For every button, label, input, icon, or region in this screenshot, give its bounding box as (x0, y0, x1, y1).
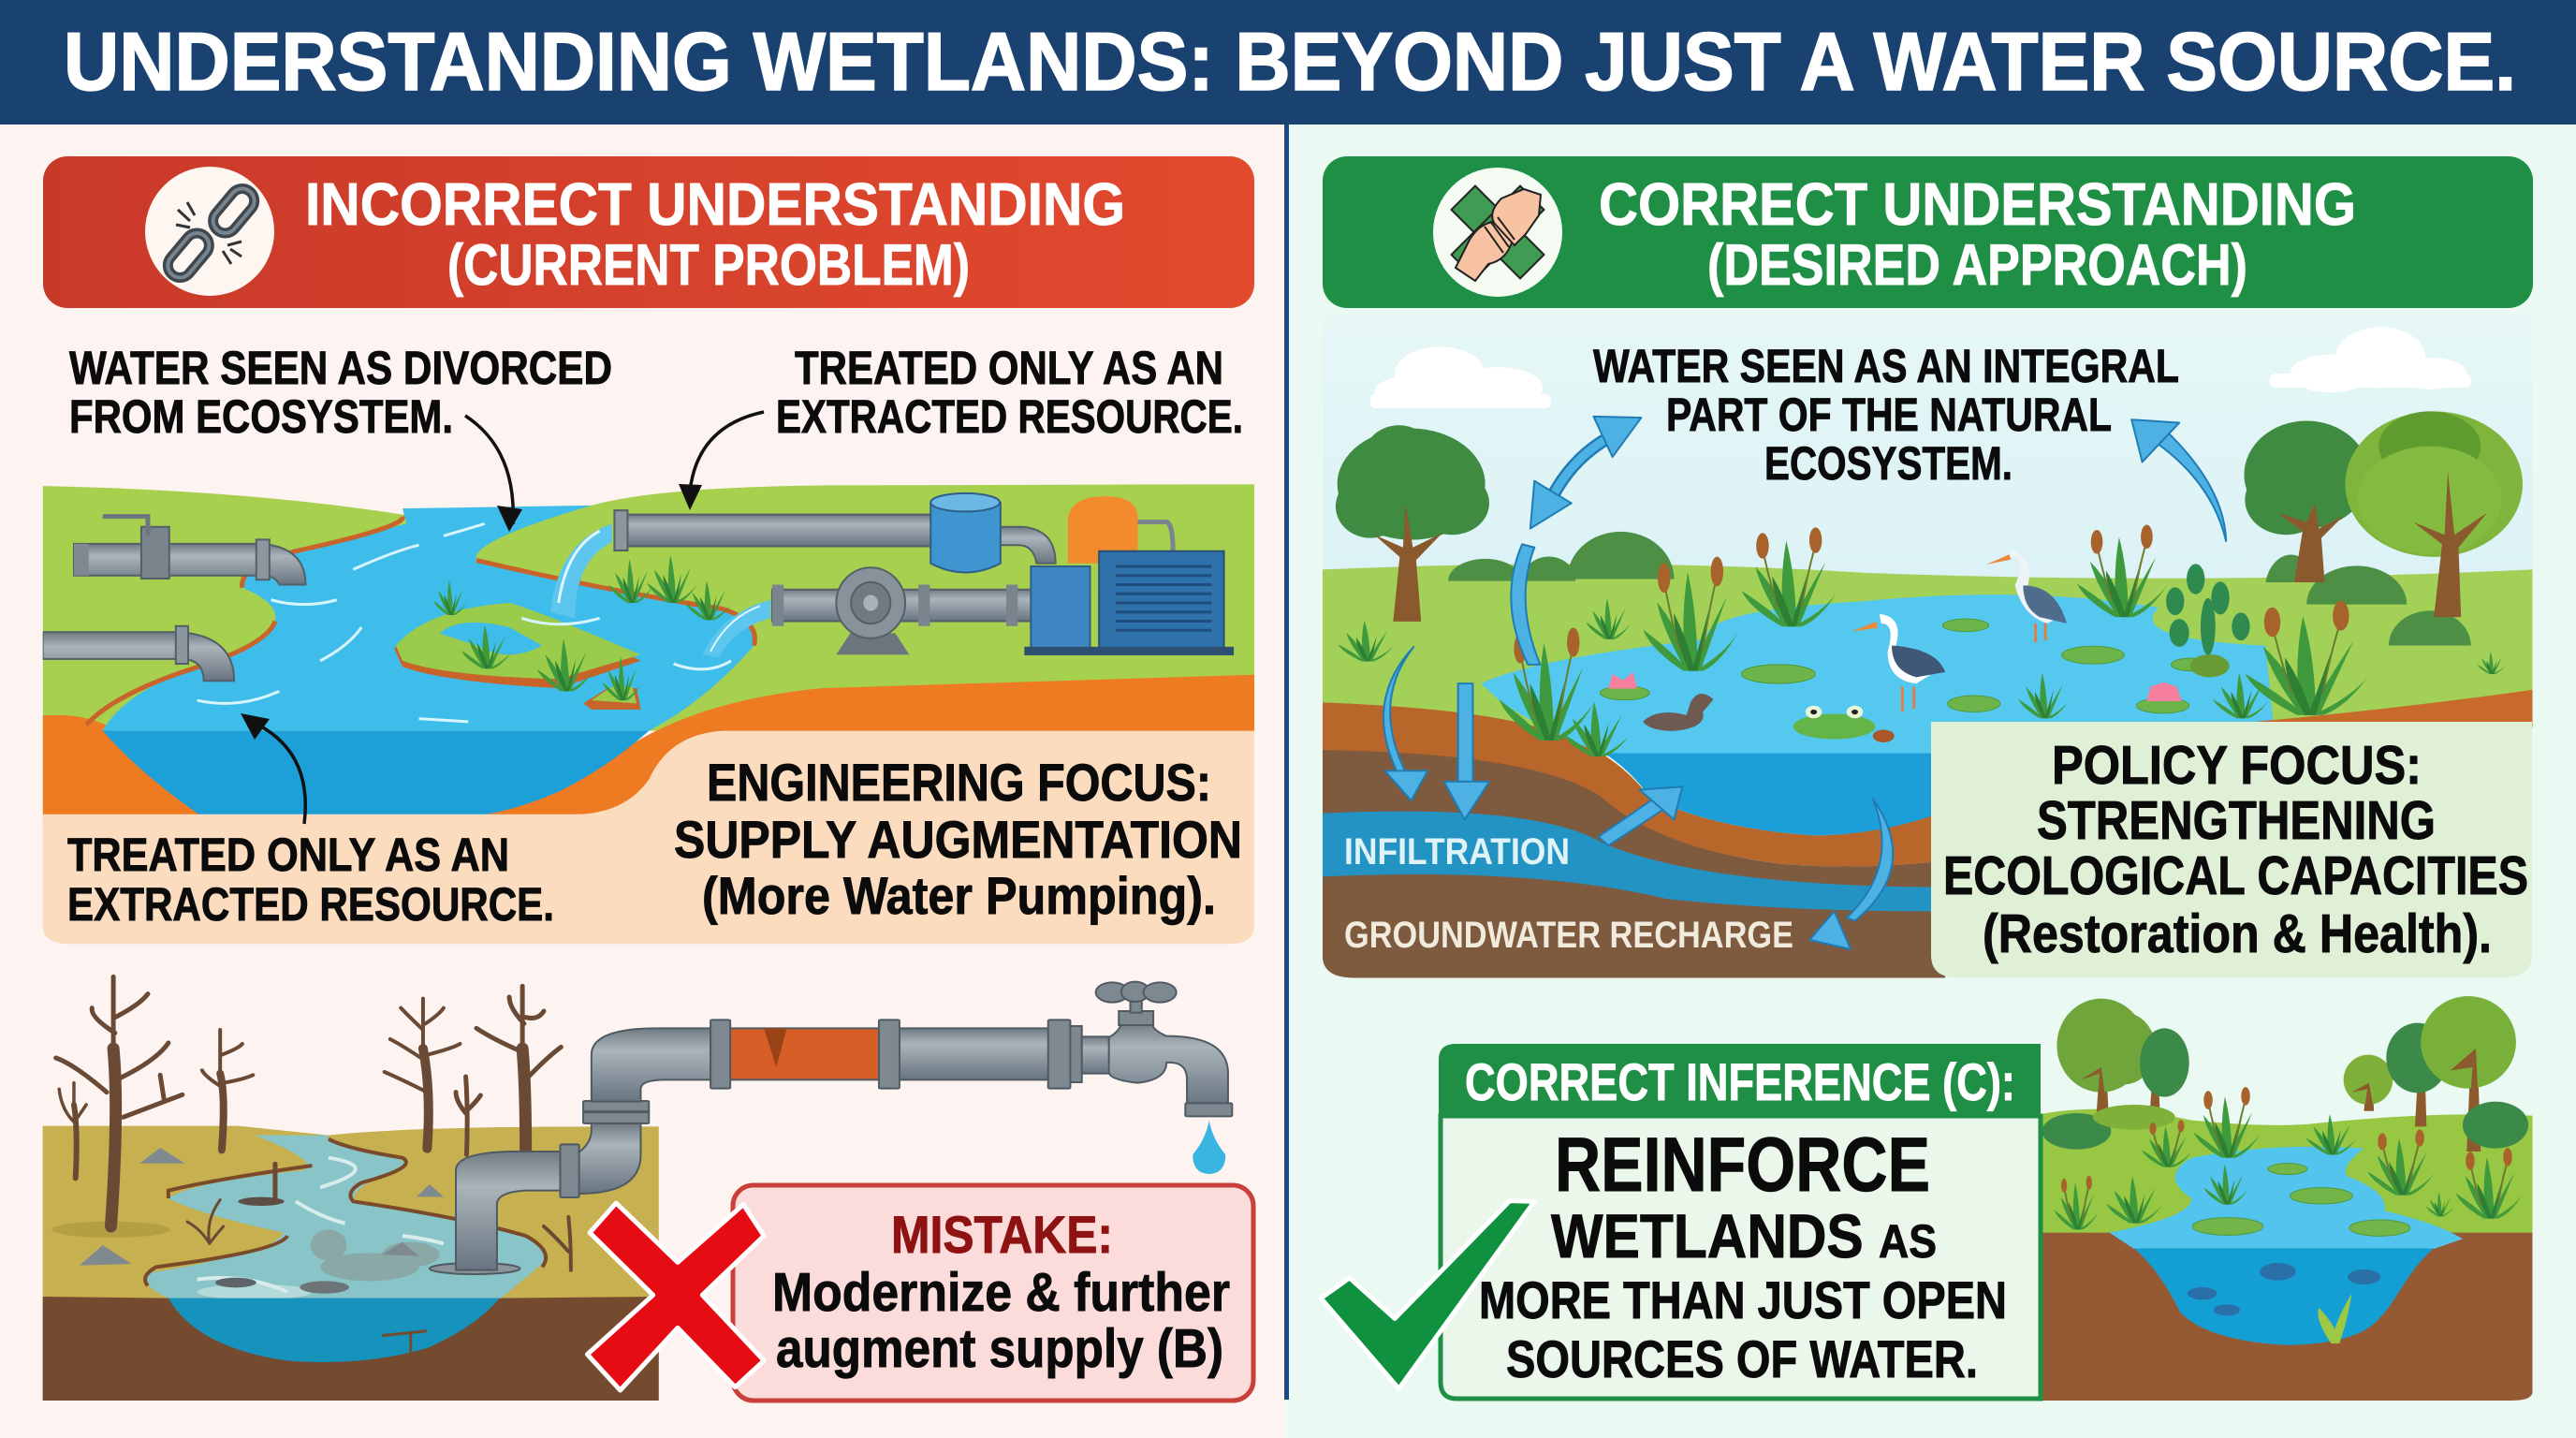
text: engineering focus (674, 753, 1242, 925)
arrow: to outfall (241, 713, 305, 824)
heron (1986, 550, 2067, 642)
background: left panel (0, 125, 1286, 1438)
right trees (2244, 411, 2523, 617)
callout: divorced from ecosystem (69, 342, 612, 443)
reeds (433, 554, 730, 700)
lily pads (1600, 619, 2212, 713)
panel: engineering focus background (43, 731, 1254, 944)
water drop (1193, 1121, 1225, 1174)
land (2041, 1109, 2532, 1236)
header text (305, 170, 1125, 298)
icon: joined hands (1433, 168, 1562, 297)
background bushes (1448, 532, 2471, 646)
faucet pipe (430, 982, 1232, 1274)
arrow: to pipe (679, 412, 764, 510)
callout: extracted resource bottom: EXTRACTED RESOURCE. (67, 878, 554, 931)
rocks (80, 1148, 444, 1294)
inference text: REINFORCE (1555, 1123, 1930, 1208)
callout: mistake (733, 1185, 1253, 1401)
sky (1323, 394, 2533, 579)
left tree (1336, 425, 1489, 622)
fish (2188, 1263, 2380, 1315)
clouds (1370, 328, 2471, 408)
text: policy focus: STRENGTHENING (2037, 790, 2436, 851)
text: engineering focus: ENGINEERING FOCUS: (707, 753, 1211, 812)
inference heading: CORRECT INFERENCE (C): (1465, 1052, 2015, 1111)
title banner (0, 0, 2576, 125)
deep water (2134, 1248, 2434, 1345)
inference text: MORE THAN JUST OPEN (1479, 1270, 2007, 1329)
inference heading (1439, 1044, 2041, 1116)
soil (43, 675, 1254, 819)
duck (1643, 694, 1714, 731)
callout: mistake: Modernize & further (772, 1262, 1230, 1323)
header text (1599, 170, 2356, 298)
dry ground (43, 1126, 659, 1301)
lotus flowers (1608, 672, 2182, 701)
reeds and cattails (1339, 525, 2506, 756)
water cycle arrows (1383, 417, 2226, 949)
callout: extracted resource bottom: TREATED ONLY AS AN (67, 829, 509, 881)
inference text: SOURCES OF WATER. (1506, 1329, 1978, 1388)
text: engineering focus: (More Water Pumping). (702, 866, 1216, 925)
label: infiltration: INFILTRATION (1344, 831, 1570, 873)
panel: incorrect understanding header (43, 156, 1254, 308)
pipe 1 with valve (74, 517, 305, 584)
header text: INCORRECT UNDERSTANDING (305, 170, 1125, 238)
stream (2110, 1147, 2463, 1249)
land (43, 484, 1254, 731)
mud patches (198, 1229, 439, 1299)
inference text (1479, 1123, 2007, 1388)
callout: extracted resource top: EXTRACTED RESOURCE. (776, 390, 1243, 443)
callout: divorced from ecosystem: FROM ECOSYSTEM. (69, 390, 453, 443)
pipe 2 (43, 626, 234, 681)
text: policy focus (1943, 735, 2528, 964)
callout: mistake: augment supply (B) (776, 1318, 1223, 1379)
land (1323, 564, 2532, 727)
label: groundwater recharge: GROUNDWATER RECHARGE (1344, 915, 1793, 956)
dead trees (56, 976, 571, 1270)
reeds (2055, 1087, 2523, 1343)
callout: extracted resource bottom (67, 829, 554, 931)
panel: policy focus background (1931, 722, 2532, 977)
icon: red X (587, 1203, 764, 1390)
icon: green check (1321, 1201, 1534, 1388)
callout: mistake: MISTAKE: (891, 1205, 1113, 1264)
pipe 3 and tanks (614, 493, 1173, 572)
illustration: healthy wetland (2041, 996, 2533, 1401)
pump machine (772, 551, 1234, 655)
arrow: to river (465, 416, 522, 532)
text: policy focus: POLICY FOCUS: (2052, 735, 2422, 796)
header text: (DESIRED APPROACH) (1707, 233, 2247, 298)
label: water integral: ECOSYSTEM. (1764, 437, 2012, 490)
panel: correct understanding header (1323, 156, 2533, 308)
center divider (1284, 125, 1289, 1400)
callout: extracted resource top (776, 342, 1243, 443)
label: water integral: WATER SEEN AS AN INTEGRAL (1593, 340, 2179, 392)
text: policy focus: (Restoration & Health). (1983, 903, 2492, 964)
frog (1793, 706, 1895, 742)
header text: CORRECT UNDERSTANDING (1599, 170, 2356, 238)
text: engineering focus: SUPPLY AUGMENTATION (674, 810, 1242, 869)
lily pads (2192, 1164, 2410, 1236)
panel: wetland ecosystem scene (1323, 316, 2532, 977)
callout: extracted resource top: TREATED ONLY AS AN (795, 342, 1223, 394)
callout: divorced from ecosystem: WATER SEEN AS DIVORCED (69, 342, 612, 394)
egret (1852, 614, 1945, 712)
soil layers (1323, 702, 1945, 866)
pond (1481, 594, 2274, 756)
island (394, 603, 640, 710)
header text: (CURRENT PROBLEM) (447, 233, 970, 298)
leafy plant (2166, 564, 2250, 677)
river (146, 1136, 544, 1299)
background: right panel (1286, 125, 2576, 1438)
river (103, 506, 754, 731)
water spouts (550, 523, 770, 658)
soil (2041, 1233, 2533, 1401)
trees (2042, 996, 2528, 1152)
label: water integral (1593, 340, 2179, 490)
illustration: degraded wetland (43, 976, 1232, 1401)
panel: extraction scene (43, 484, 1254, 819)
icon: broken chain (145, 167, 274, 296)
water highlights (198, 523, 731, 722)
soil (43, 1297, 659, 1401)
label: water integral: PART OF THE NATURAL (1666, 389, 2112, 441)
panel: correct inference box (1439, 1044, 2041, 1399)
inference text: WETLANDS AS (1551, 1201, 1937, 1270)
deep basin (168, 1299, 500, 1362)
